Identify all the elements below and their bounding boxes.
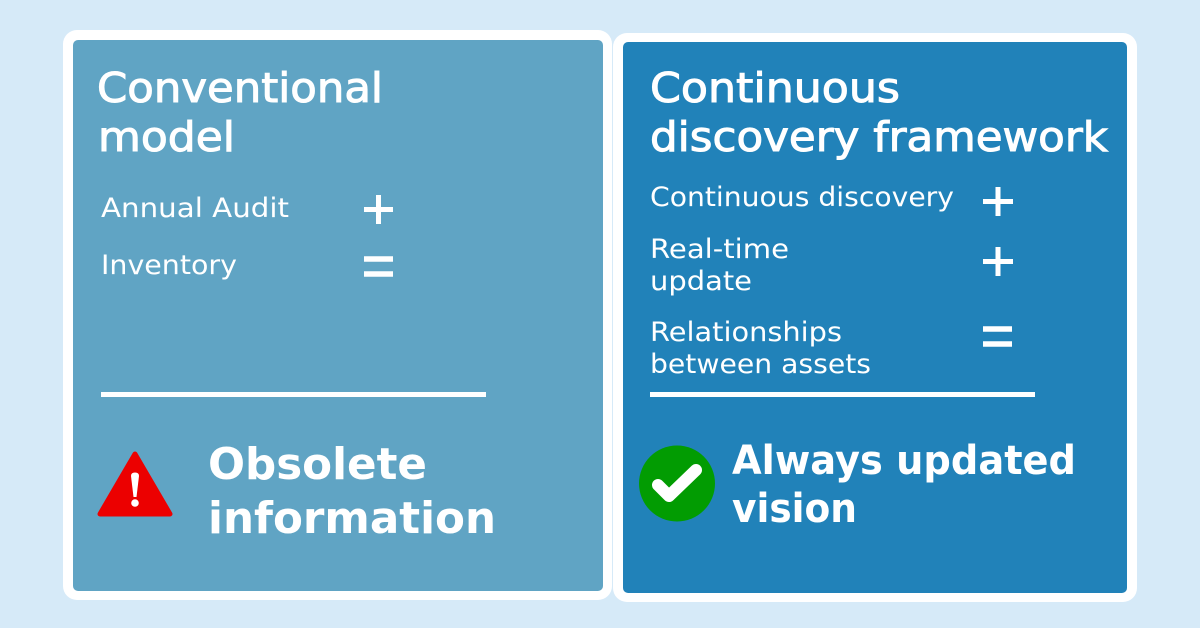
- panel: conventional model: [63, 30, 612, 600]
- text: real-time update: Real-time: [650, 234, 789, 265]
- icon: equals: [983, 329, 1012, 344]
- icon: plus: [983, 187, 1013, 216]
- text: inventory: Inventory: [101, 250, 237, 281]
- icon: plus: [364, 195, 393, 224]
- result: obsolete information: Obsolete: [208, 439, 427, 490]
- result: always updated vision: vision: [732, 486, 857, 532]
- text: real-time update: update: [650, 266, 752, 297]
- result: obsolete information: information: [208, 493, 496, 544]
- icon: warning triangle: [100, 454, 170, 514]
- heading: conventional model: model: [98, 113, 235, 161]
- result: always updated vision: [732, 438, 1076, 532]
- text: relationships between assets: between assets: [650, 349, 871, 380]
- icon: green check: [639, 446, 715, 522]
- heading: continuous discovery framework: [650, 64, 1108, 161]
- heading: conventional model: Conventional: [97, 64, 383, 112]
- icon: equals: [364, 259, 393, 274]
- text: real-time update: [650, 234, 789, 297]
- icon: plus: [983, 247, 1013, 276]
- text: annual audit: Annual Audit: [101, 193, 289, 224]
- text: relationships between assets: Relationships: [650, 317, 842, 348]
- panel: continuous discovery framework: [613, 33, 1137, 602]
- heading: continuous discovery framework: Continuous: [650, 64, 900, 112]
- result: always updated vision: Always updated: [732, 438, 1076, 484]
- text: relationships between assets: [650, 317, 871, 380]
- heading: continuous discovery framework: discovery framework: [650, 113, 1108, 161]
- heading: conventional model: [97, 64, 383, 161]
- text: continuous discovery: Continuous discovery: [650, 182, 954, 213]
- result: obsolete information: [208, 439, 496, 544]
